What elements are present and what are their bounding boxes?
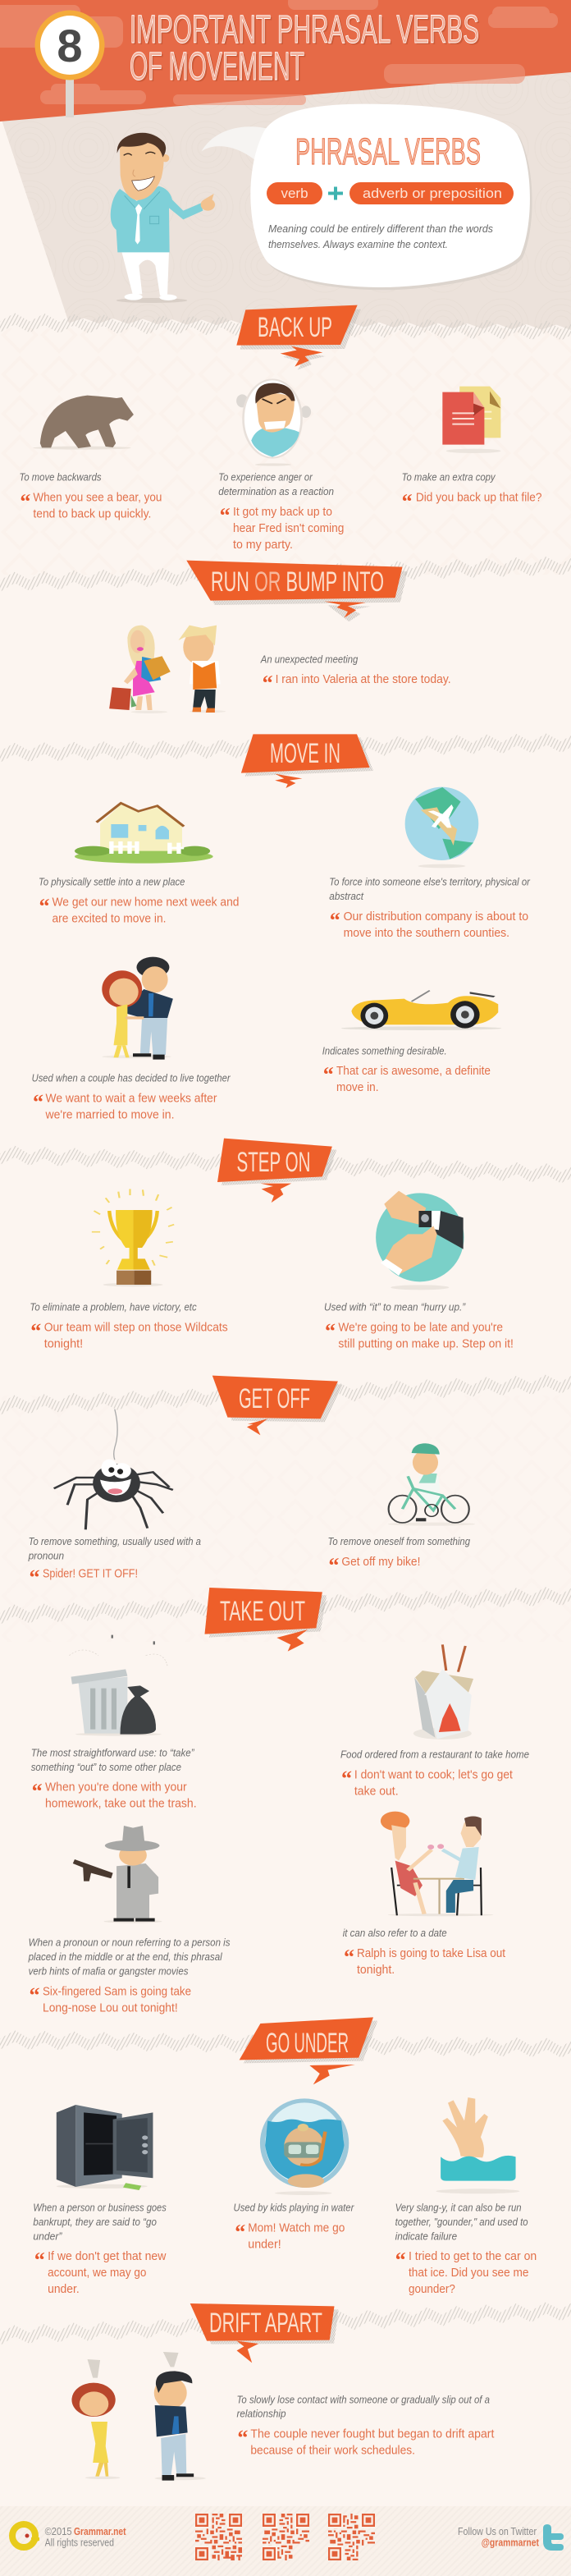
item: indicates something desirable: Indicates something desirable.	[322, 1045, 447, 1057]
item: food ordered from a restaurant	[340, 1749, 529, 1798]
icon: cyclist	[388, 1443, 475, 1526]
heading banner: step on	[217, 1139, 336, 1203]
item: to move backwards: tend to back up quickly.	[33, 507, 151, 521]
item: person or business bankrupt: “	[34, 2248, 45, 2272]
item: food ordered from a restaurant: I don't want to cook; let's go get	[354, 1767, 514, 1781]
item: to physically settle: We get our new home next week and	[53, 896, 240, 910]
heading banner: take out	[204, 1588, 327, 1652]
item: very slang gounder: gounder?	[409, 2282, 455, 2296]
heading banner: go under: GO UNDER	[266, 2028, 349, 2059]
icon: trash can and bag	[69, 1635, 167, 1736]
icon: unhappy couple	[71, 2352, 206, 2481]
item: an unexpected meeting: I ran into Valeria at the store today.	[276, 672, 451, 686]
follow us text: @grammarnet	[482, 2537, 540, 2549]
icon: globe with plane	[405, 787, 478, 868]
footer	[0, 2506, 571, 2576]
item: couple live together: We want to wait a few weeks after	[46, 1091, 217, 1105]
item: most straightforward use: homework, take out the trash.	[45, 1797, 197, 1811]
icon: open safe	[57, 2105, 153, 2190]
item: to physically settle: To physically settle into a new place	[39, 877, 185, 888]
icon: gangster with tommy gun	[73, 1826, 162, 1923]
item: mafia or gangster movies: placed in the middle or at the end, this phrasal	[28, 1951, 223, 1963]
item: to experience anger: To experience anger or	[218, 472, 313, 484]
panel: back up	[20, 305, 541, 552]
item: person or business bankrupt: under.	[48, 2282, 80, 2296]
bubble description: Meaning could be entirely different than the words	[268, 222, 493, 235]
item: mafia or gangster movies: Six-fingered Sam is going take	[43, 1984, 191, 1998]
item: indicates something desirable: That car is awesome, a definite	[336, 1064, 491, 1078]
sign with number 8	[34, 10, 105, 117]
icon: couple bumping into each other	[109, 626, 226, 713]
item: very slang gounder: “	[395, 2248, 406, 2272]
QR code 3	[328, 2514, 375, 2560]
item: to force into territory: abstract	[329, 891, 363, 902]
item: indicates something desirable: move in.	[336, 1080, 379, 1094]
item: most straightforward use: When you're done with your	[45, 1781, 187, 1794]
item: couple live together: Used when a couple has decided to live together	[32, 1072, 231, 1084]
item: couple live together	[32, 1072, 231, 1121]
item: very slang gounder: indicate failure	[395, 2230, 457, 2242]
QR code 1	[195, 2514, 242, 2560]
heading banner: back up	[236, 305, 361, 370]
item: to slowly lose contact: “	[237, 2426, 248, 2450]
item: to eliminate a problem: Our team will step on those Wildcats	[44, 1320, 228, 1334]
heading banner: drift apart	[190, 2303, 339, 2363]
icon: yellow sports car	[341, 991, 501, 1030]
heading banner: get off: GET OFF	[239, 1383, 310, 1414]
item: to remove oneself: “	[328, 1554, 339, 1578]
item: to slowly lose contact: The couple never fought but began to drift apart	[250, 2427, 495, 2441]
item: refer to a date: Ralph is going to take Lisa out	[357, 1946, 506, 1960]
item: most straightforward use	[31, 1748, 197, 1811]
item: kids playing in water: under!	[248, 2238, 281, 2252]
item: person or business bankrupt: bankrupt, they are said to “go	[33, 2216, 157, 2228]
item: kids playing in water: Mom! Watch me go	[248, 2221, 345, 2235]
formula: verb plus adverb or preposition	[267, 182, 514, 204]
panel: step on	[30, 1139, 514, 1350]
item: to move backwards	[20, 472, 162, 521]
icon: bear	[33, 396, 134, 450]
item: to force into territory: move into the southern counties.	[344, 926, 509, 940]
item: refer to a date: tonight.	[357, 1963, 395, 1977]
item: to physically settle: “	[39, 894, 49, 918]
item: to force into territory: To force into someone else's territory, physical or	[329, 877, 531, 888]
item: couple live together: we're married to move in.	[45, 1107, 175, 1121]
bubble description	[268, 222, 493, 250]
item: person or business bankrupt: account, we may go	[48, 2266, 146, 2280]
copyright text: All rights reserved	[45, 2537, 114, 2549]
item: food ordered from a restaurant: “	[341, 1767, 352, 1790]
icon: couple together	[102, 957, 173, 1060]
QR code 2	[263, 2514, 309, 2560]
item: very slang gounder: that ice. Did you see me	[409, 2266, 528, 2280]
item: mafia or gangster movies: verb hints of mafia or gangster movies	[29, 1965, 188, 1977]
item: used with it to mean hurry up	[324, 1301, 514, 1350]
header clouds	[0, 0, 558, 105]
item: to move backwards: To move backwards	[20, 472, 102, 484]
heading banner: back up: BACK UP	[258, 312, 332, 343]
item: food ordered from a restaurant: take out.	[354, 1784, 399, 1798]
item: used with it to mean hurry up: Used with “it” to mean “hurry up.”	[324, 1301, 466, 1313]
panel: drift apart	[71, 2303, 495, 2481]
heading banner: drift apart: DRIFT APART	[209, 2308, 322, 2339]
heading banner: go under	[240, 2017, 377, 2084]
item: to remove oneself: Get off my bike!	[341, 1555, 420, 1569]
item: very slang gounder: Very slang-y, it can also be run	[395, 2202, 522, 2214]
item: person or business bankrupt	[33, 2202, 167, 2296]
icon: takeout box with chopsticks	[413, 1644, 473, 1739]
item: mafia or gangster movies: Long-nose Lou out tonight!	[43, 2001, 178, 2015]
item: to remove something: To remove something, usually used with a	[29, 1536, 201, 1547]
icon: snorkel diver	[260, 2098, 349, 2195]
item: person or business bankrupt: When a person or business goes	[33, 2202, 167, 2214]
item: mafia or gangster movies: When a pronoun or noun referring to a person is	[29, 1937, 230, 1949]
formula: verb plus adverb or preposition: verb	[281, 186, 308, 201]
item: indicates something desirable	[322, 1045, 491, 1094]
heading banner: run or bump into	[186, 561, 408, 621]
item: kids playing in water	[233, 2202, 354, 2252]
item: to slowly lose contact	[236, 2394, 495, 2457]
panel: run or bump into	[109, 561, 451, 713]
item: to force into territory: “	[330, 909, 340, 933]
item: very slang gounder: together, "gounder," and used to	[395, 2216, 528, 2228]
heading banner: run or bump into: RUN OR BUMP INTO	[211, 566, 384, 598]
item: refer to a date: it can also refer to a date	[343, 1927, 447, 1939]
heading banner: get off	[212, 1376, 342, 1435]
item: used with it to mean hurry up: “	[325, 1319, 336, 1343]
item: to slowly lose contact: because of their work schedules.	[250, 2443, 415, 2457]
heading banner: take out: TAKE OUT	[220, 1596, 305, 1627]
panel: get off	[28, 1376, 475, 1589]
item: to remove something: pronoun	[28, 1550, 64, 1561]
item: couple live together: “	[33, 1090, 43, 1114]
panel: move in	[32, 734, 531, 1121]
copyright text	[45, 2525, 126, 2549]
item: refer to a date: “	[344, 1946, 354, 1969]
item: to move backwards: “	[20, 489, 30, 513]
panel: go under	[33, 2017, 537, 2296]
item: food ordered from a restaurant: Food ordered from a restaurant to take home	[340, 1749, 529, 1760]
item: used with it to mean hurry up: still putting on make up. Step on it!	[338, 1336, 514, 1350]
heading banner: move in: MOVE IN	[270, 738, 340, 769]
title: OF MOVEMENT	[130, 45, 304, 89]
item: to force into territory	[329, 877, 531, 940]
item: person or business bankrupt: If we don't get that new	[48, 2249, 167, 2263]
panel: take out	[28, 1588, 529, 2015]
item: to eliminate a problem: “	[30, 1319, 41, 1343]
item: refer to a date	[343, 1927, 506, 1977]
item: to experience anger: determination as a reaction	[218, 486, 334, 497]
item: to eliminate a problem	[30, 1301, 228, 1350]
item: to experience anger: to my party.	[233, 538, 293, 552]
item: to make an extra copy: “	[402, 489, 413, 513]
icon: couple on a date	[381, 1812, 493, 1916]
item: kids playing in water: Used by kids playing in water	[233, 2202, 354, 2214]
item: to remove something	[28, 1536, 201, 1589]
character: smiling man pointing	[111, 133, 215, 303]
item: an unexpected meeting	[260, 653, 451, 695]
speech bubble panel	[201, 104, 532, 290]
item: very slang gounder: I tried to get to the car on	[409, 2249, 537, 2263]
item: to remove something: Spider! GET IT OFF!	[43, 1566, 138, 1580]
heading banner: step on: STEP ON	[236, 1147, 310, 1178]
item: person or business bankrupt: under”	[33, 2230, 62, 2242]
icon: twitter t	[543, 2524, 564, 2551]
background: beige intro area	[0, 66, 571, 330]
item: most straightforward use: “	[32, 1779, 43, 1803]
item: most straightforward use: something “out” to some other place	[31, 1762, 181, 1773]
item: to remove something: “	[30, 1565, 39, 1589]
item: kids playing in water: “	[235, 2220, 245, 2244]
item: to make an extra copy	[402, 472, 541, 513]
title: OF MOVEMENT	[131, 47, 306, 90]
item: to slowly lose contact: relationship	[236, 2409, 286, 2420]
item: to remove oneself	[328, 1536, 470, 1578]
item: to make an extra copy: To make an extra copy	[402, 472, 496, 484]
icon: file documents	[442, 387, 500, 453]
icon: house	[75, 803, 213, 864]
item: to physically settle	[39, 877, 240, 926]
bubble description: themselves. Always examine the context.	[268, 238, 448, 250]
item: to remove oneself: To remove oneself from something	[328, 1536, 470, 1547]
item: to physically settle: are excited to move in.	[53, 912, 166, 926]
item: to eliminate a problem: tonight!	[44, 1336, 83, 1350]
icon: spider	[54, 1409, 173, 1529]
item: mafia or gangster movies	[28, 1937, 230, 2015]
item: most straightforward use: The most straightforward use: to “take”	[31, 1748, 194, 1759]
item: to experience anger: hear Fred isn't coming	[233, 521, 344, 535]
icon: hand sinking in water	[436, 2097, 519, 2193]
icon: pointing at wristwatch	[376, 1191, 464, 1290]
item: very slang gounder	[395, 2202, 537, 2296]
formula: verb plus adverb or preposition: adverb or preposition	[363, 186, 502, 201]
item: to experience anger: It got my back up to	[233, 505, 332, 519]
heading banner: move in	[241, 734, 373, 788]
item: used with it to mean hurry up: We're going to be late and you're	[338, 1320, 503, 1334]
icon: angry man portrait	[236, 379, 311, 466]
title	[130, 8, 481, 90]
follow us text: Follow Us on Twitter	[458, 2525, 537, 2537]
copyright text: ©2015	[45, 2525, 72, 2537]
copyright text: Grammar.net	[74, 2525, 126, 2537]
bubble shape	[201, 104, 532, 290]
icon: trophy	[92, 1189, 174, 1286]
item: to force into territory: Our distribution company is about to	[344, 910, 528, 924]
sign with number 8: 8	[57, 20, 83, 71]
item: an unexpected meeting: An unexpected meeting	[260, 653, 358, 665]
item: an unexpected meeting: “	[263, 672, 273, 695]
header band	[0, 0, 571, 121]
logo: grammar.net G	[12, 2524, 39, 2547]
item: to make an extra copy: Did you back up that file?	[416, 491, 541, 505]
item: to move backwards: When you see a bear, you	[33, 491, 162, 505]
item: to eliminate a problem: To eliminate a problem, have victory, etc	[30, 1301, 197, 1313]
item: to experience anger: “	[220, 504, 231, 528]
item: mafia or gangster movies: “	[30, 1983, 39, 2007]
item: to slowly lose contact: To slowly lose contact with someone or gradually slip out of a	[236, 2394, 490, 2405]
item: to experience anger	[218, 472, 344, 552]
item: indicates something desirable: “	[323, 1063, 334, 1087]
follow us text	[458, 2525, 540, 2549]
